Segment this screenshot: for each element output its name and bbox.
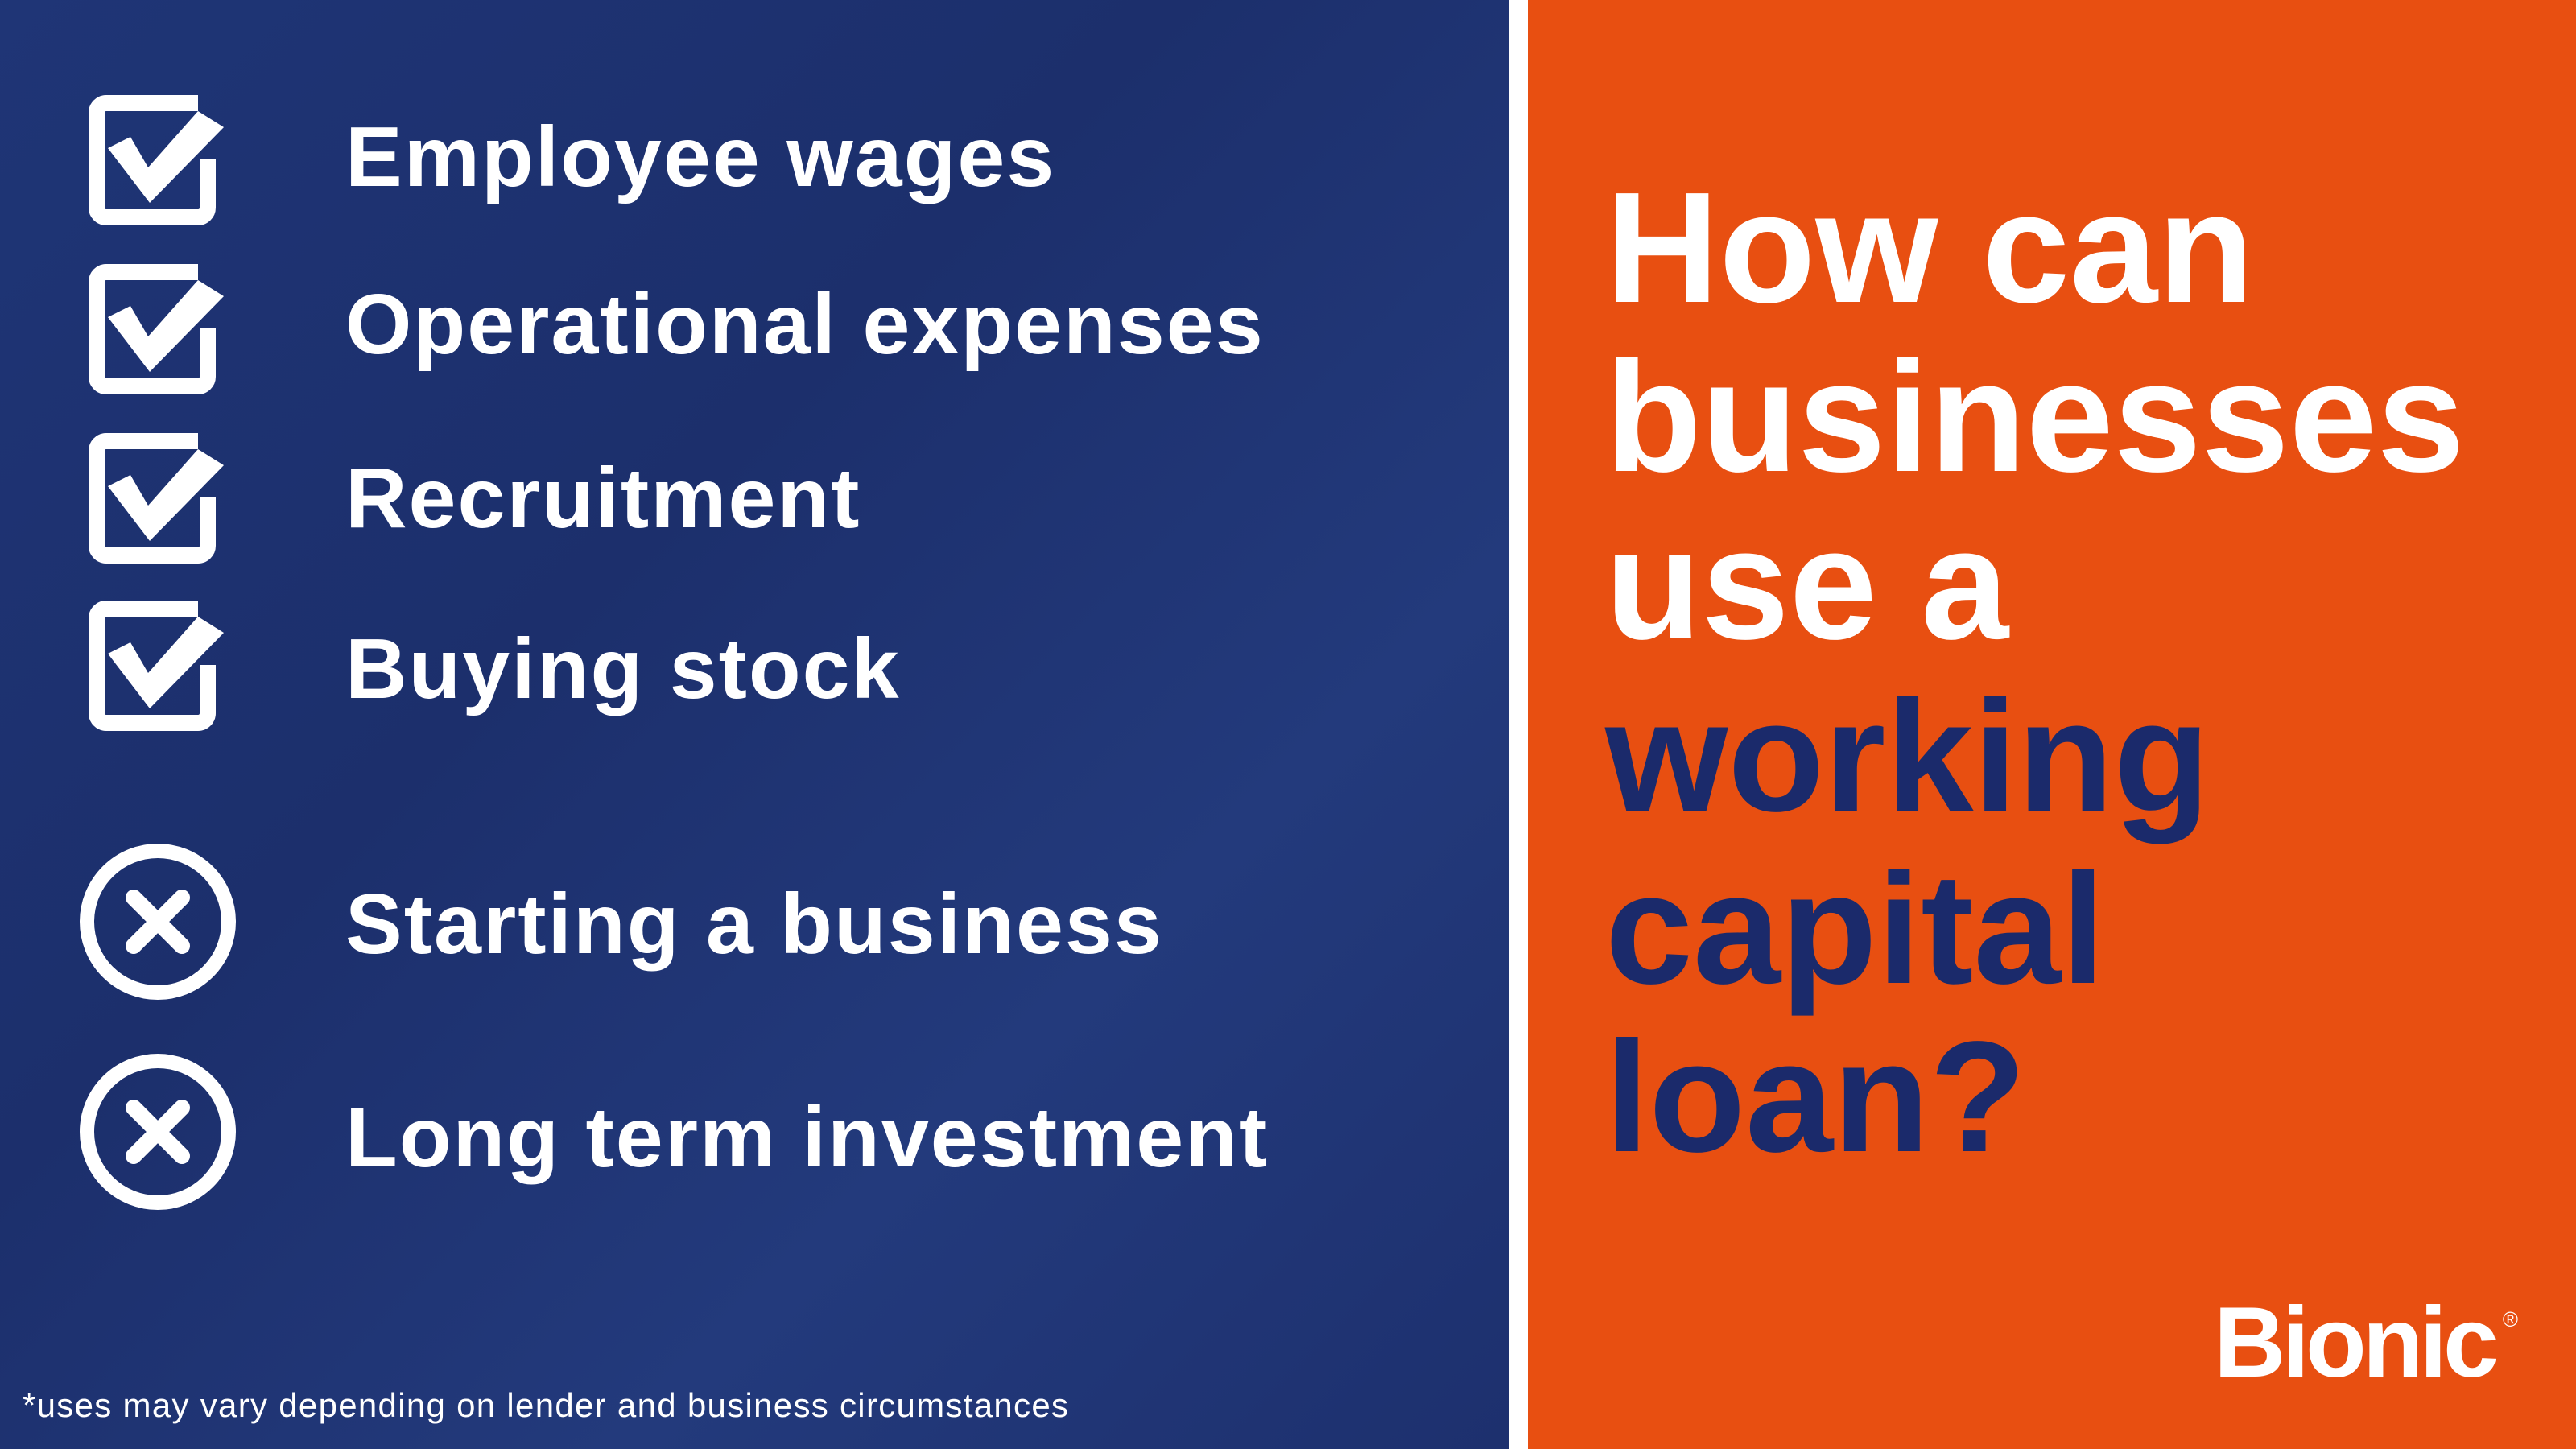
icon: checkbox 3 — [89, 433, 224, 564]
title: How can — [1605, 159, 2254, 336]
panel: right orange — [1528, 0, 2576, 1449]
footnote: *uses may vary depending on lender and business circumstances — [23, 1386, 1069, 1424]
title: businesses — [1605, 328, 2465, 505]
logo: Bionic: Bionic ® — [2214, 1287, 2514, 1398]
text: employee wages: Employee wages — [345, 109, 1055, 204]
icon: checkbox 4 — [89, 601, 224, 731]
icon: checkbox 1 — [89, 95, 224, 225]
title: loan? — [1605, 1009, 2026, 1185]
text: recruitment: Recruitment — [345, 451, 861, 546]
icon: cross circle 2 — [80, 1054, 236, 1210]
text: operational expenses: Operational expenses — [345, 277, 1265, 372]
title — [1605, 159, 2465, 1185]
title: working — [1605, 668, 2210, 844]
title: use a — [1605, 496, 2008, 672]
panel: left blue — [0, 0, 1509, 1449]
text: starting a business: Starting a business — [345, 877, 1163, 972]
title: capital — [1605, 840, 2105, 1017]
icon: cross circle 1 — [80, 844, 236, 1000]
text: buying stock: Buying stock — [345, 621, 901, 716]
text: long term investment: Long term investment — [345, 1090, 1269, 1185]
icon: checkbox 2 — [89, 264, 224, 394]
